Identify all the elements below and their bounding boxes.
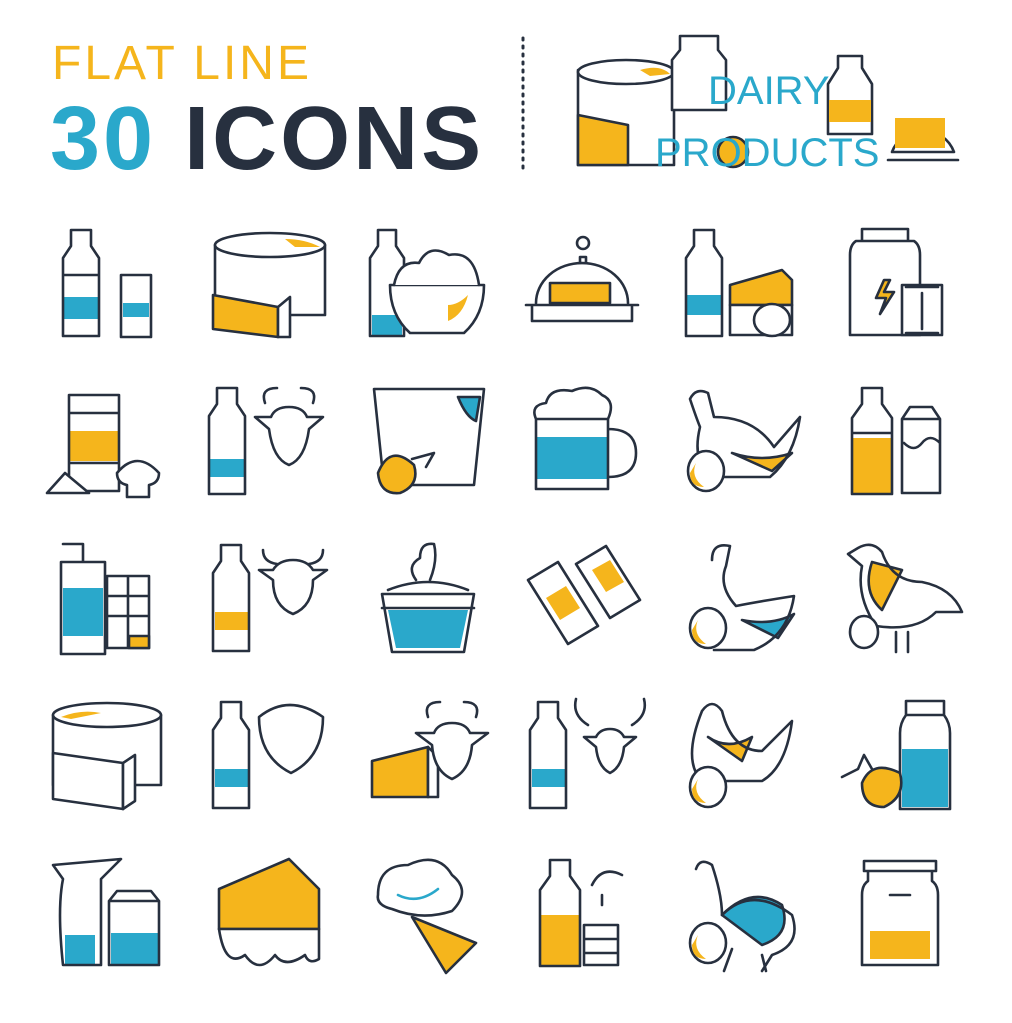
- icon: milk can: [862, 861, 938, 965]
- logo: dairy products: [578, 36, 958, 175]
- icon: swan and egg: [690, 545, 794, 650]
- title: flat line: FLAT LINE: [52, 37, 312, 90]
- icon: cheese wedge: [219, 859, 319, 965]
- icon: big cheese wheel: [53, 703, 161, 809]
- icon: bottle and glass: [63, 230, 151, 337]
- icon: quail and egg: [848, 545, 962, 652]
- icon: bottle and coins: [540, 860, 622, 966]
- icon: goose and egg: [688, 391, 800, 491]
- icon: cheese and goat: [372, 702, 488, 797]
- icon: ice cream cone: [378, 860, 476, 973]
- icon: glass and chocolate: [61, 544, 149, 654]
- icon: butter dish: [526, 237, 638, 321]
- icon: jar and dumbbell: [850, 229, 942, 335]
- icon: protein bars: [528, 546, 640, 644]
- icon: strawberry and bottle: [842, 701, 950, 809]
- icon: jug and carton: [53, 859, 159, 965]
- logo: dairy products: DAIRY: [708, 69, 830, 113]
- icon: bottle and goat: [209, 388, 323, 494]
- icon: mug: [534, 388, 636, 489]
- icon: bottle and cow: [213, 545, 327, 651]
- icon: jar and mushroom: [47, 395, 159, 497]
- icon: bottle cheese egg: [686, 230, 792, 336]
- icon: bottle and camel: [213, 702, 323, 808]
- icon: hen and egg: [690, 704, 792, 807]
- icon: cheese wheel: [213, 233, 325, 337]
- icon: ice cream cup: [382, 544, 474, 652]
- icon: bottle and carton: [852, 388, 940, 494]
- icon: ostrich and egg: [690, 862, 794, 971]
- icon: bottle and bowl: [370, 230, 484, 337]
- logo: dairy products: PRODUCTS: [655, 131, 879, 175]
- title: 30 icons: 30 ICONS: [50, 89, 484, 189]
- icon: bottle and deer: [530, 699, 645, 808]
- icon: yogurt cup and strawberry: [374, 389, 484, 493]
